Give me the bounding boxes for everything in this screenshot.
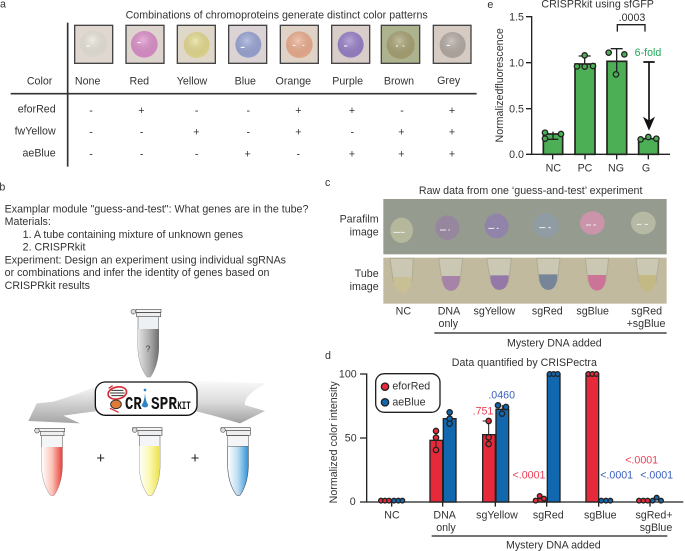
row headers: aeBlue bbox=[22, 148, 56, 160]
plus and minus grid: + bbox=[449, 105, 455, 117]
p values: <.0001 bbox=[625, 455, 658, 467]
p values: <.0001 bbox=[640, 469, 673, 481]
plus sign: + bbox=[96, 451, 105, 467]
y axis label: Normalizedfluorescence bbox=[494, 28, 506, 142]
lane labels: +sgBlue bbox=[627, 318, 665, 330]
y axis label: Normalized color intensity bbox=[328, 381, 340, 503]
panel label d: d bbox=[325, 350, 331, 362]
parafilm image bbox=[383, 199, 667, 254]
plus and minus grid: + bbox=[398, 149, 404, 161]
column headers: Yellow bbox=[177, 75, 208, 87]
y tick labels: 50 bbox=[345, 433, 357, 445]
group labels: sgBlue bbox=[640, 522, 672, 534]
column headers: Blue bbox=[235, 75, 256, 87]
lane labels: sgRed bbox=[532, 305, 563, 317]
row headers: fwYellow bbox=[15, 125, 56, 137]
color swatches bbox=[75, 25, 471, 63]
panel c: raw data images bbox=[325, 177, 667, 349]
module description text: Experiment: Design an experiment using individual sgRNAs bbox=[5, 254, 286, 266]
group labels: DNA bbox=[433, 509, 457, 521]
column headers: Purple bbox=[332, 75, 363, 87]
y tick labels bbox=[339, 369, 357, 508]
plus and minus grid: - bbox=[297, 149, 301, 161]
error bars bbox=[548, 49, 623, 139]
plus and minus grid: - bbox=[247, 127, 251, 139]
panel e: CRISPRkit using sfGFP bar chart bbox=[487, 0, 670, 174]
significance bracket bbox=[617, 12, 645, 32]
x tick labels: PC bbox=[578, 162, 593, 174]
plus and minus grid: - bbox=[195, 149, 199, 161]
module description text: CRISPRkit results bbox=[5, 280, 90, 292]
plus sign: + bbox=[191, 451, 199, 467]
p values: <.0001 bbox=[513, 469, 546, 481]
legend: aeBlue bbox=[392, 396, 426, 408]
arrow: gray right sweep bbox=[195, 381, 267, 423]
arrow: gray left sweep bbox=[28, 385, 98, 423]
plus and minus grid: + bbox=[295, 127, 301, 139]
plus and minus grid: + bbox=[245, 149, 251, 161]
group labels: sgBlue bbox=[584, 509, 617, 521]
lane labels: sgBlue bbox=[576, 305, 609, 317]
row labels bbox=[340, 213, 379, 293]
plus and minus grid: + bbox=[449, 149, 455, 161]
red tube bbox=[35, 428, 65, 496]
module description text bbox=[5, 203, 308, 292]
lane labels: only bbox=[439, 318, 459, 330]
column headers: Orange bbox=[276, 75, 311, 87]
plus and minus grid: + bbox=[349, 149, 355, 161]
panel b: guess-and-test module bbox=[0, 182, 308, 496]
unknown gene tube: ? bbox=[146, 344, 151, 354]
CRISPRkit logo bbox=[95, 382, 197, 415]
plus and minus grid: - bbox=[351, 127, 355, 139]
lane labels: NC bbox=[396, 305, 411, 317]
column headers: Brown bbox=[384, 75, 414, 87]
group labels: sgRed+ bbox=[635, 509, 673, 521]
p values: .751 bbox=[473, 406, 493, 418]
yellow tube bbox=[132, 428, 162, 496]
tube image bbox=[383, 258, 667, 304]
p values: .0460 bbox=[488, 390, 515, 402]
module description text: Materials: bbox=[5, 216, 51, 228]
row labels: Parafilm bbox=[340, 213, 379, 225]
mystery DNA bracket: Mystery DNA added bbox=[507, 337, 602, 349]
y tick labels: 1.0 bbox=[509, 57, 524, 69]
plus and minus grid: - bbox=[89, 105, 93, 117]
panel a: chromoprotein color table bbox=[0, 0, 477, 167]
plus and minus grid: - bbox=[140, 127, 144, 139]
y tick labels bbox=[509, 12, 524, 161]
plus and minus grid: - bbox=[400, 105, 404, 117]
row labels: Tube bbox=[355, 268, 379, 280]
row labels: image bbox=[350, 281, 379, 293]
6-fold arrow bbox=[635, 47, 661, 131]
group labels: sgYellow bbox=[476, 509, 518, 521]
legend: eforRed bbox=[392, 380, 430, 392]
heading d: Data quantified by CRISPectra bbox=[452, 357, 597, 369]
error bars bbox=[436, 405, 502, 450]
row headers: eforRed bbox=[18, 104, 56, 116]
heading a: Combinations of chromoproteins generate distinct color patterns bbox=[126, 9, 428, 21]
plus and minus grid: - bbox=[89, 149, 93, 161]
column headers: None bbox=[75, 75, 100, 87]
column headers bbox=[75, 75, 461, 87]
significance bracket: .0003 bbox=[619, 12, 645, 24]
module description text: Examplar module "guess-and-test": What genes are in the tube? bbox=[5, 203, 308, 215]
axes bbox=[360, 373, 683, 507]
CRISPRkit logo: KIT bbox=[177, 401, 191, 413]
plus and minus grid: - bbox=[195, 105, 199, 117]
heading c: Raw data from one ‘guess-and-test’ experiment bbox=[419, 185, 642, 197]
plus and minus grid: - bbox=[247, 105, 251, 117]
lane labels: sgRed bbox=[631, 305, 662, 317]
panel label c: c bbox=[325, 177, 331, 189]
plus and minus grid: + bbox=[193, 127, 199, 139]
module description text: or combinations and infer the identity of genes based on bbox=[5, 267, 270, 279]
group labels: NC bbox=[384, 509, 400, 521]
x tick labels bbox=[546, 162, 650, 174]
plus and minus grid: + bbox=[449, 127, 455, 139]
y tick labels: 100 bbox=[339, 369, 357, 381]
plus and minus grid: + bbox=[349, 105, 355, 117]
lane labels bbox=[396, 305, 665, 330]
plus and minus grid: + bbox=[398, 127, 404, 139]
data points bbox=[379, 372, 663, 503]
axes bbox=[526, 16, 670, 159]
plus and minus grid bbox=[89, 105, 455, 161]
p values bbox=[473, 390, 673, 481]
column headers: Red bbox=[130, 75, 149, 87]
data points bbox=[542, 50, 659, 142]
row labels: image bbox=[350, 226, 379, 238]
CRISPRkit logo: CR bbox=[125, 393, 142, 415]
y tick labels: 0 bbox=[350, 496, 356, 508]
lane labels: sgYellow bbox=[473, 305, 515, 317]
x tick labels: G bbox=[642, 162, 650, 174]
CRISPRkit logo: SPR bbox=[151, 393, 178, 415]
p values: <.0001 bbox=[600, 469, 633, 481]
blue tube bbox=[221, 428, 250, 496]
6-fold arrow: 6-fold bbox=[635, 47, 661, 59]
group labels: sgRed bbox=[533, 509, 564, 521]
bars bbox=[430, 374, 599, 502]
table rules bbox=[11, 23, 477, 167]
y tick labels: 1.5 bbox=[509, 12, 524, 24]
x tick labels: NG bbox=[608, 162, 624, 174]
x tick labels: NC bbox=[546, 162, 561, 174]
group labels bbox=[384, 509, 673, 534]
module description text: 2. CRISPRkit bbox=[23, 242, 85, 254]
plus and minus grid: - bbox=[140, 149, 144, 161]
plus and minus grid: + bbox=[295, 105, 301, 117]
y tick labels: 0.5 bbox=[509, 103, 524, 115]
plus and minus grid: + bbox=[138, 105, 144, 117]
panel d: color intensity bar chart bbox=[325, 350, 683, 551]
row headers bbox=[15, 76, 56, 160]
y tick labels: 0.0 bbox=[509, 149, 524, 161]
column headers: Grey bbox=[437, 75, 461, 87]
legend bbox=[376, 374, 440, 412]
unknown gene tube bbox=[131, 309, 161, 377]
row headers: Color bbox=[27, 76, 53, 88]
group labels: only bbox=[436, 522, 456, 534]
bars bbox=[543, 61, 658, 154]
lane labels: DNA bbox=[438, 305, 461, 317]
module description text: 1. A tube containing mixture of unknown genes bbox=[23, 229, 243, 241]
plus and minus grid: - bbox=[89, 127, 93, 139]
